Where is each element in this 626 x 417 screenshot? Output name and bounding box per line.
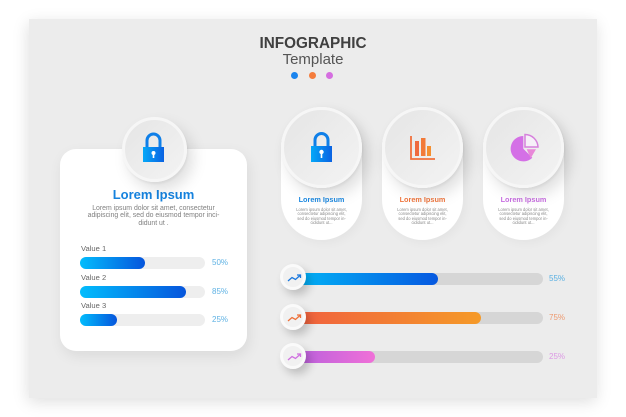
value 3 bar (80, 314, 205, 326)
value 3 label: Value 3 (81, 301, 106, 310)
pill text (498, 207, 549, 225)
icon: card lock circle (122, 117, 187, 182)
icon: pie chart circle (483, 107, 564, 188)
pill text: cididunt ut... (512, 220, 535, 225)
icon: blue trend knob (280, 264, 306, 290)
pill text: consectetur adipiscing elit, (499, 211, 548, 216)
pill text: Lorem ipsum dolor sit amet, (397, 207, 448, 212)
card body text: didunt ut . (138, 220, 169, 227)
pill heading: Lorem Ipsum (299, 195, 344, 204)
percent: blue: 55% (549, 274, 565, 283)
pill text: consectetur adipiscing elit, (297, 211, 346, 216)
panel: left card (60, 149, 247, 351)
pill text (397, 207, 448, 225)
pill text: cididunt ut... (411, 220, 434, 225)
panel: orange pill (382, 107, 463, 240)
value 2 bar (80, 286, 205, 298)
panel: purple pill (483, 107, 564, 240)
value 3 percent: 25% (212, 315, 228, 324)
value 1 percent: 50% (212, 258, 228, 267)
icon: purple trend knob (280, 343, 306, 369)
pill text: cididunt ut... (310, 220, 333, 225)
card body text: Lorem ipsum dolor sit amet, consectetur (92, 204, 215, 212)
legend dots (291, 72, 333, 79)
icon: lock circle (281, 107, 362, 188)
panel: blue pill (281, 107, 362, 240)
pill text (296, 207, 347, 225)
pill text: consectetur adipiscing elit, (398, 211, 446, 216)
percent: purple: 25% (549, 352, 565, 361)
pill heading: Lorem Ipsum (400, 195, 445, 204)
icon: bar chart circle (382, 107, 463, 188)
card body text: adipiscing elit, sed do eiusmod tempor inci- (88, 212, 219, 219)
progress bar: blue (295, 273, 543, 284)
subtitle: Template (283, 51, 343, 68)
progress bar: purple (295, 351, 543, 362)
pill text: sed do eiusmod tempor in- (398, 216, 447, 221)
card body text (88, 204, 220, 227)
percent: orange: 75% (549, 313, 565, 322)
pill text: sed do eiusmod tempor in- (499, 216, 548, 221)
pill text: Lorem ipsum dolor sit amet, (498, 207, 549, 212)
pill text: Lorem ipsum dolor sit amet, (296, 207, 347, 212)
title: INFOGRAPHIC (259, 35, 367, 52)
card heading: Lorem Ipsum (113, 187, 194, 202)
value 1 label: Value 1 (81, 244, 106, 253)
value 2 percent: 85% (212, 287, 228, 296)
progress bar: orange (295, 312, 543, 324)
value 2 label: Value 2 (81, 273, 106, 282)
pill heading: Lorem Ipsum (501, 195, 546, 204)
pill text: sed do eiusmod tempor in- (297, 216, 346, 221)
icon: orange trend knob (280, 304, 306, 330)
value 1 bar (80, 257, 205, 269)
